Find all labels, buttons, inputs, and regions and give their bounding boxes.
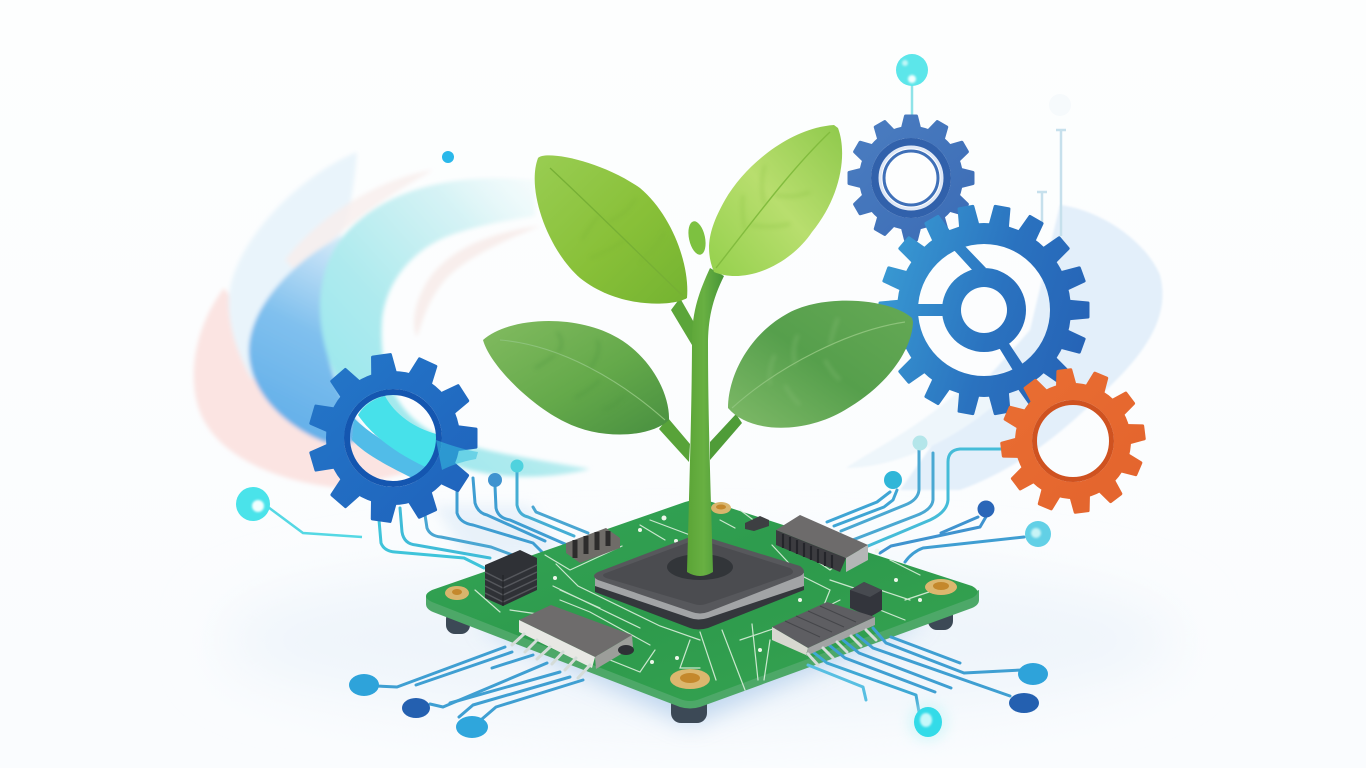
decorative thin lines upper right (1037, 94, 1071, 236)
leaf: upper right (709, 125, 842, 276)
board shadow feet (446, 606, 953, 723)
bud (686, 220, 708, 256)
wire end nodes (349, 663, 1048, 742)
central processor chip (594, 536, 804, 630)
large gear (878, 204, 1090, 416)
left glowing node with wire (236, 487, 362, 537)
circuit board (426, 500, 979, 708)
small floating dot (442, 151, 454, 163)
top glowing node with wire (896, 54, 928, 118)
leaf: upper left (535, 155, 687, 304)
heatsink block (485, 550, 537, 606)
circuit wires upper right (827, 436, 1051, 562)
mounting holes (445, 502, 957, 689)
orange gear (1000, 368, 1146, 514)
left gear with swirl seen through the hole (309, 353, 478, 523)
top right chip (776, 515, 868, 572)
circuit wires upper left (379, 460, 588, 568)
small component (745, 516, 769, 531)
wires lower left (376, 647, 583, 719)
top gear (848, 114, 974, 242)
illustration: seedling growing from a circuit board with gears (192, 54, 1163, 747)
left background swirls (194, 152, 590, 488)
solder specks (553, 516, 922, 664)
lower right chip (772, 602, 876, 665)
plant stem (659, 268, 742, 576)
lower left chip (512, 605, 634, 678)
upright black capacitor block (850, 582, 882, 617)
ground shadow (220, 505, 1180, 725)
right background swirl blob (846, 205, 1163, 490)
wires lower right (808, 628, 1022, 712)
leaf: lower right (728, 301, 913, 428)
leaf: lower left (483, 321, 669, 435)
board traces (475, 510, 935, 690)
top left connector (566, 528, 620, 563)
